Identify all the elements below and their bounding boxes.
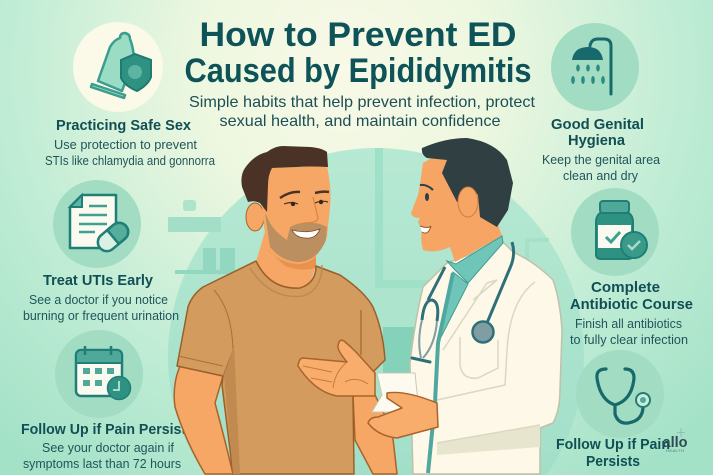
description: symptoms last than 72 hours [23, 457, 181, 471]
allo health logo: allo [662, 434, 688, 451]
patient far forearm [353, 395, 397, 474]
panel: follow up right [556, 350, 670, 470]
subtitle: Simple habits that help prevent infection, protect [189, 94, 536, 111]
title: Caused by Epididymitis [184, 52, 532, 90]
heading: Complete [591, 279, 660, 296]
allo health logo [662, 428, 688, 453]
heading [556, 436, 670, 470]
heading: Follow Up if Pain Persists [21, 421, 194, 438]
title [184, 16, 532, 90]
illustration: patient [174, 146, 397, 474]
subtitle: sexual health, and maintain confidence [220, 113, 501, 130]
illustration: doctor [298, 138, 562, 474]
heading: Follow Up if Pain [556, 436, 670, 453]
icon: pill bottle [571, 188, 659, 276]
coat front placket [428, 273, 453, 473]
description [570, 317, 688, 347]
patient hand [298, 340, 375, 396]
patient head [241, 146, 331, 262]
description: clean and dry [563, 169, 639, 183]
patient neck [256, 228, 316, 290]
coat shadow band [437, 425, 540, 455]
shirt folds [178, 265, 361, 474]
doctor stethoscope [412, 242, 514, 362]
description: burning or frequent urination [23, 309, 179, 323]
heading: Practicing Safe Sex [56, 117, 192, 134]
description [23, 441, 181, 471]
heading: Persists [586, 453, 640, 470]
heading: Hygiena [568, 132, 626, 149]
doctor shirt and collar [438, 236, 503, 343]
icon: shower [551, 23, 639, 111]
doctor coat [410, 242, 562, 474]
description: Use protection to prevent [54, 138, 198, 152]
description: STIs like chlamydia and gonnorra [45, 154, 215, 168]
description [23, 293, 179, 323]
doctor ear [458, 187, 478, 217]
icon: calendar and clock [55, 330, 143, 418]
description [542, 153, 660, 183]
description: Finish all antibiotics [575, 317, 682, 331]
heading [551, 116, 644, 149]
icon: condom and shield [73, 22, 163, 112]
description: See your doctor again if [42, 441, 175, 455]
panel: follow up left [21, 330, 194, 471]
allo health logo: HEALTH [666, 448, 684, 453]
description [45, 138, 215, 168]
heading: Antibiotic Course [570, 296, 693, 313]
title: How to Prevent ED [200, 16, 516, 54]
panel: practicing safe sex [45, 22, 215, 168]
doctor neck and face [411, 150, 502, 262]
panel: good genital hygiena [542, 23, 660, 183]
coat details [437, 280, 540, 443]
panel: treat UTIs early [23, 180, 179, 323]
description: to fully clear infection [570, 333, 688, 347]
patient t-shirt [177, 261, 385, 474]
heading [570, 279, 693, 313]
subtitle [189, 94, 536, 130]
doctor cuff [372, 373, 418, 412]
neck shadow [266, 248, 316, 270]
doctor face details [420, 185, 433, 233]
panel: complete antibiotic course [570, 188, 693, 347]
patient arm [174, 366, 233, 474]
clinic background circle [168, 148, 584, 475]
description: See a doctor if you notice [29, 293, 168, 307]
doctor hair [422, 138, 513, 227]
icon: document and pill [53, 180, 141, 268]
doctor hand [368, 392, 438, 438]
icon: stethoscope [576, 350, 664, 438]
heading: Good Genital [551, 116, 644, 133]
description: Keep the genital area [542, 153, 660, 167]
heading: Treat UTIs Early [43, 272, 154, 289]
